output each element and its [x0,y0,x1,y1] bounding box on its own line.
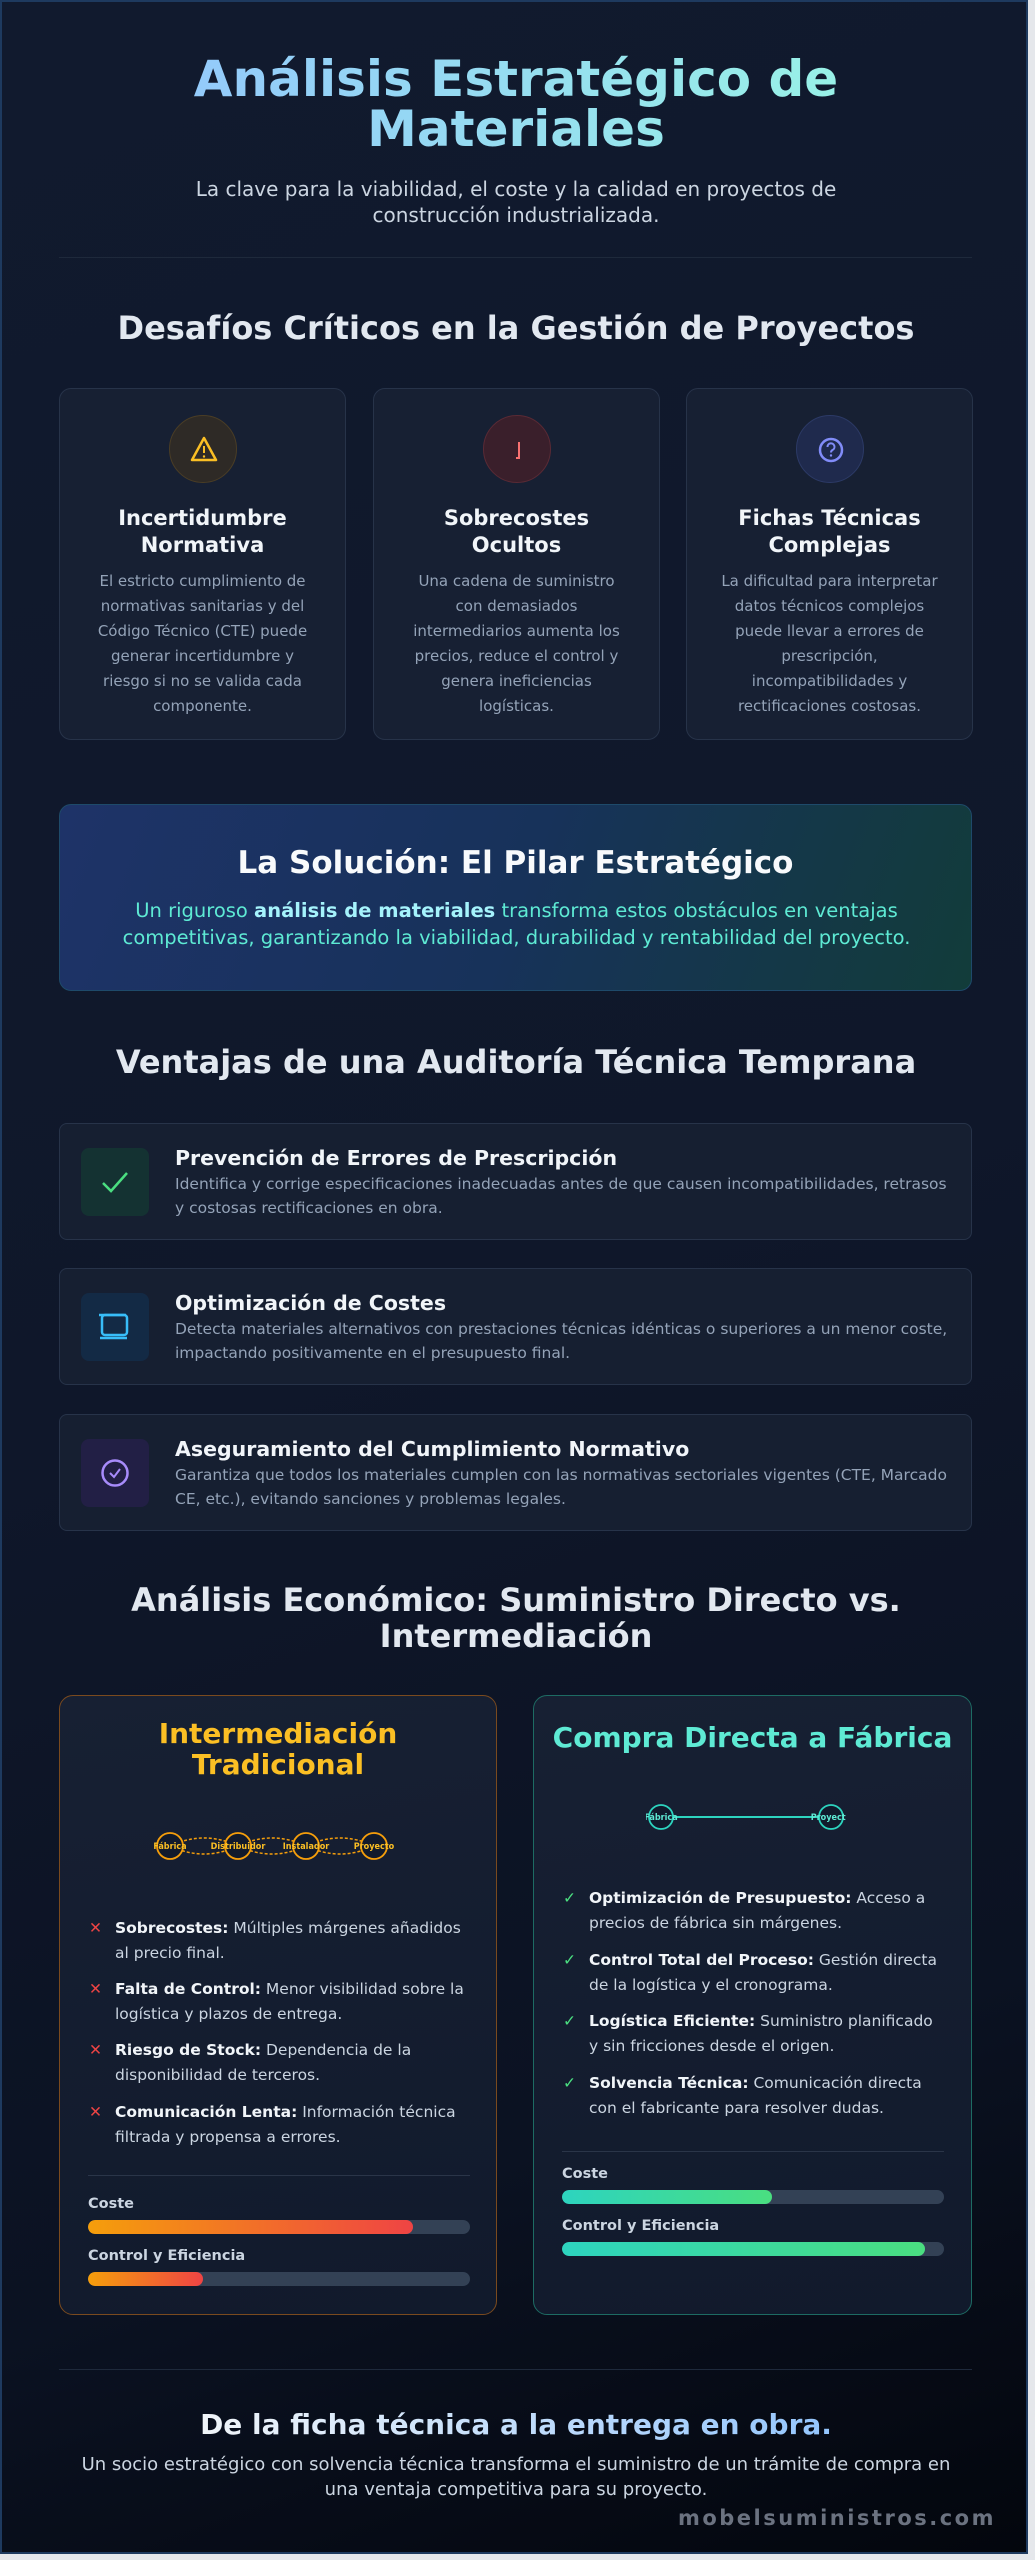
heading: analisis economico: Análisis Económico: Suministro Directo vs. [131,1581,901,1619]
icon: badge check [81,1439,149,1507]
solution title: La Solución: El Pilar Estratégico [238,845,793,881]
bar chart: control [88,2248,470,2286]
list: disadvantages: Falta de Control: Menor visibilidad sobre la logística y plazos de entrega. [115,1980,464,2023]
closing heading: De la ficha técnica a la entrega en obra. [200,2408,832,2441]
list: advantages: Control Total del Proceso: Gestión directa de la logística y el cronograma. [589,1951,937,1994]
heading: analisis economico [131,1581,901,1655]
list: advantages: Logística Eficiente: Suministro planificado y sin fricciones desde el origen. [589,2012,933,2055]
panel: compra directa: ✓ [563,2012,576,2030]
bar chart: coste [88,2196,470,2234]
panel title: Compra Directa a Fábrica [553,1721,952,1754]
icon: question [796,415,864,483]
panel: compra directa: ✓ [563,1889,576,1907]
advantage text: Identifica y corrige especificaciones inadecuadas antes de que causen incompatibilidades, retrasos y costosas rectificaciones en obra. [175,1175,947,1217]
title: Análisis Estratégico de Materiales [194,50,838,158]
icon: check [81,1148,149,1216]
panel: compra directa [533,1695,972,2315]
panel: advantage 2 [59,1268,972,1385]
diagram: direct [646,1804,846,1830]
bar chart: coste: Coste [562,2166,608,2182]
panel: intermediacion: ✕ [89,2103,102,2121]
panel: challenge 3 [686,388,973,740]
panel: compra directa: ✓ [563,1951,576,1969]
diagram: chain: Distribuidor [211,1842,265,1852]
subtitle: La clave para la viabilidad, el coste y la calidad en proyectos de construcción industrializada. [196,177,836,227]
panel: challenge 1 [59,388,346,740]
bar chart: control: Control y Eficiencia [562,2218,719,2234]
advantage title: Optimización de Costes [175,1291,446,1315]
panel: advantage 3 [59,1414,972,1531]
list: advantages: Solvencia Técnica: Comunicación directa con el fabricante para resolver dudas. [589,2074,922,2117]
card title: Sobrecostes [444,506,589,530]
icon: money [81,1293,149,1361]
panel title: Tradicional [192,1748,364,1781]
icon: cost [483,415,551,483]
panel: intermediacion: ✕ [89,2041,102,2059]
card title: Complejas [768,533,891,557]
list: disadvantages: Comunicación Lenta: Información técnica filtrada y propensa a errores. [115,2103,456,2146]
panel: advantage 1 [59,1123,972,1240]
advantage text: Garantiza que todos los materiales cumplen con las normativas sectoriales vigentes (CTE, Marcado CE, etc.), evitando sanciones y problemas legales. [175,1466,947,1508]
card title [118,506,287,557]
panel: compra directa: ✓ [563,2074,576,2092]
callout: solution [59,804,972,991]
card title: Fichas Técnicas [738,506,921,530]
bar chart: coste: Coste [88,2196,134,2212]
card text: El estricto cumplimiento de normativas sanitarias y del Código Técnico (CTE) puede generar incertidumbre y riesgo si no se valida cada componente. [98,572,307,715]
card text: La dificultad para interpretar datos técnicos complejos puede llevar a errores de prescripción, incompatibilidades y rectificaciones costosas. [721,572,938,715]
solution text: Un riguroso análisis de materiales transforma estos obstáculos en ventajas competitivas, garantizando la viabilidad, durabilidad y rentabilidad del proyecto. [123,899,910,949]
advantage text: Detecta materiales alternativos con prestaciones técnicas idénticas o superiores a un menor coste, impactando positivamente en el presupuesto final. [175,1320,947,1362]
card title [444,506,589,557]
diagram: chain: Fábrica [153,1842,187,1852]
card text: Una cadena de suministro con demasiados intermediarios aumenta los precios, reduce el control y genera ineficiencias logísticas. [413,572,620,715]
card title: Incertidumbre [118,506,287,530]
diagram: chain: Instalador [283,1842,329,1852]
card title: Normativa [141,533,264,557]
diagram: chain [153,1832,395,1860]
list: disadvantages: Sobrecostes: Múltiples márgenes añadidos al precio final. [115,1919,461,1962]
panel title: Intermediación [159,1717,397,1750]
heading: analisis economico: Intermediación [380,1617,652,1655]
bar chart: control [562,2218,944,2256]
card title [738,506,921,557]
panel: intermediacion [59,1695,497,2315]
panel title [159,1717,397,1781]
panel: challenge 2 [373,388,660,740]
list: advantages [563,1889,937,2117]
list: advantages: Optimización de Presupuesto: Acceso a precios de fábrica sin márgenes. [589,1889,925,1932]
closing text: Un socio estratégico con solvencia técnica transforma el suministro de un trámite de compra en una ventaja competitiva para su proyecto. [82,2454,950,2500]
bar chart: coste [562,2166,944,2204]
list: disadvantages [89,1919,464,2146]
bar chart: control: Control y Eficiencia [88,2248,245,2264]
panel: intermediacion: ✕ [89,1919,102,1937]
icon: warning [169,415,237,483]
heading: ventajas: Ventajas de una Auditoría Técnica Temprana [116,1043,916,1081]
advantage title: Aseguramiento del Cumplimiento Normativo [175,1437,689,1461]
list: disadvantages: Riesgo de Stock: Dependencia de la disponibilidad de terceros. [115,2041,411,2084]
advantage title: Prevención de Errores de Prescripción [175,1146,617,1170]
brand: mobelsuministros.com [678,2506,996,2530]
diagram: chain: Proyecto [354,1842,395,1852]
heading: desafios: Desafíos Críticos en la Gestión de Proyectos [118,309,914,347]
card title: Ocultos [472,533,561,557]
panel: intermediacion: ✕ [89,1980,102,1998]
